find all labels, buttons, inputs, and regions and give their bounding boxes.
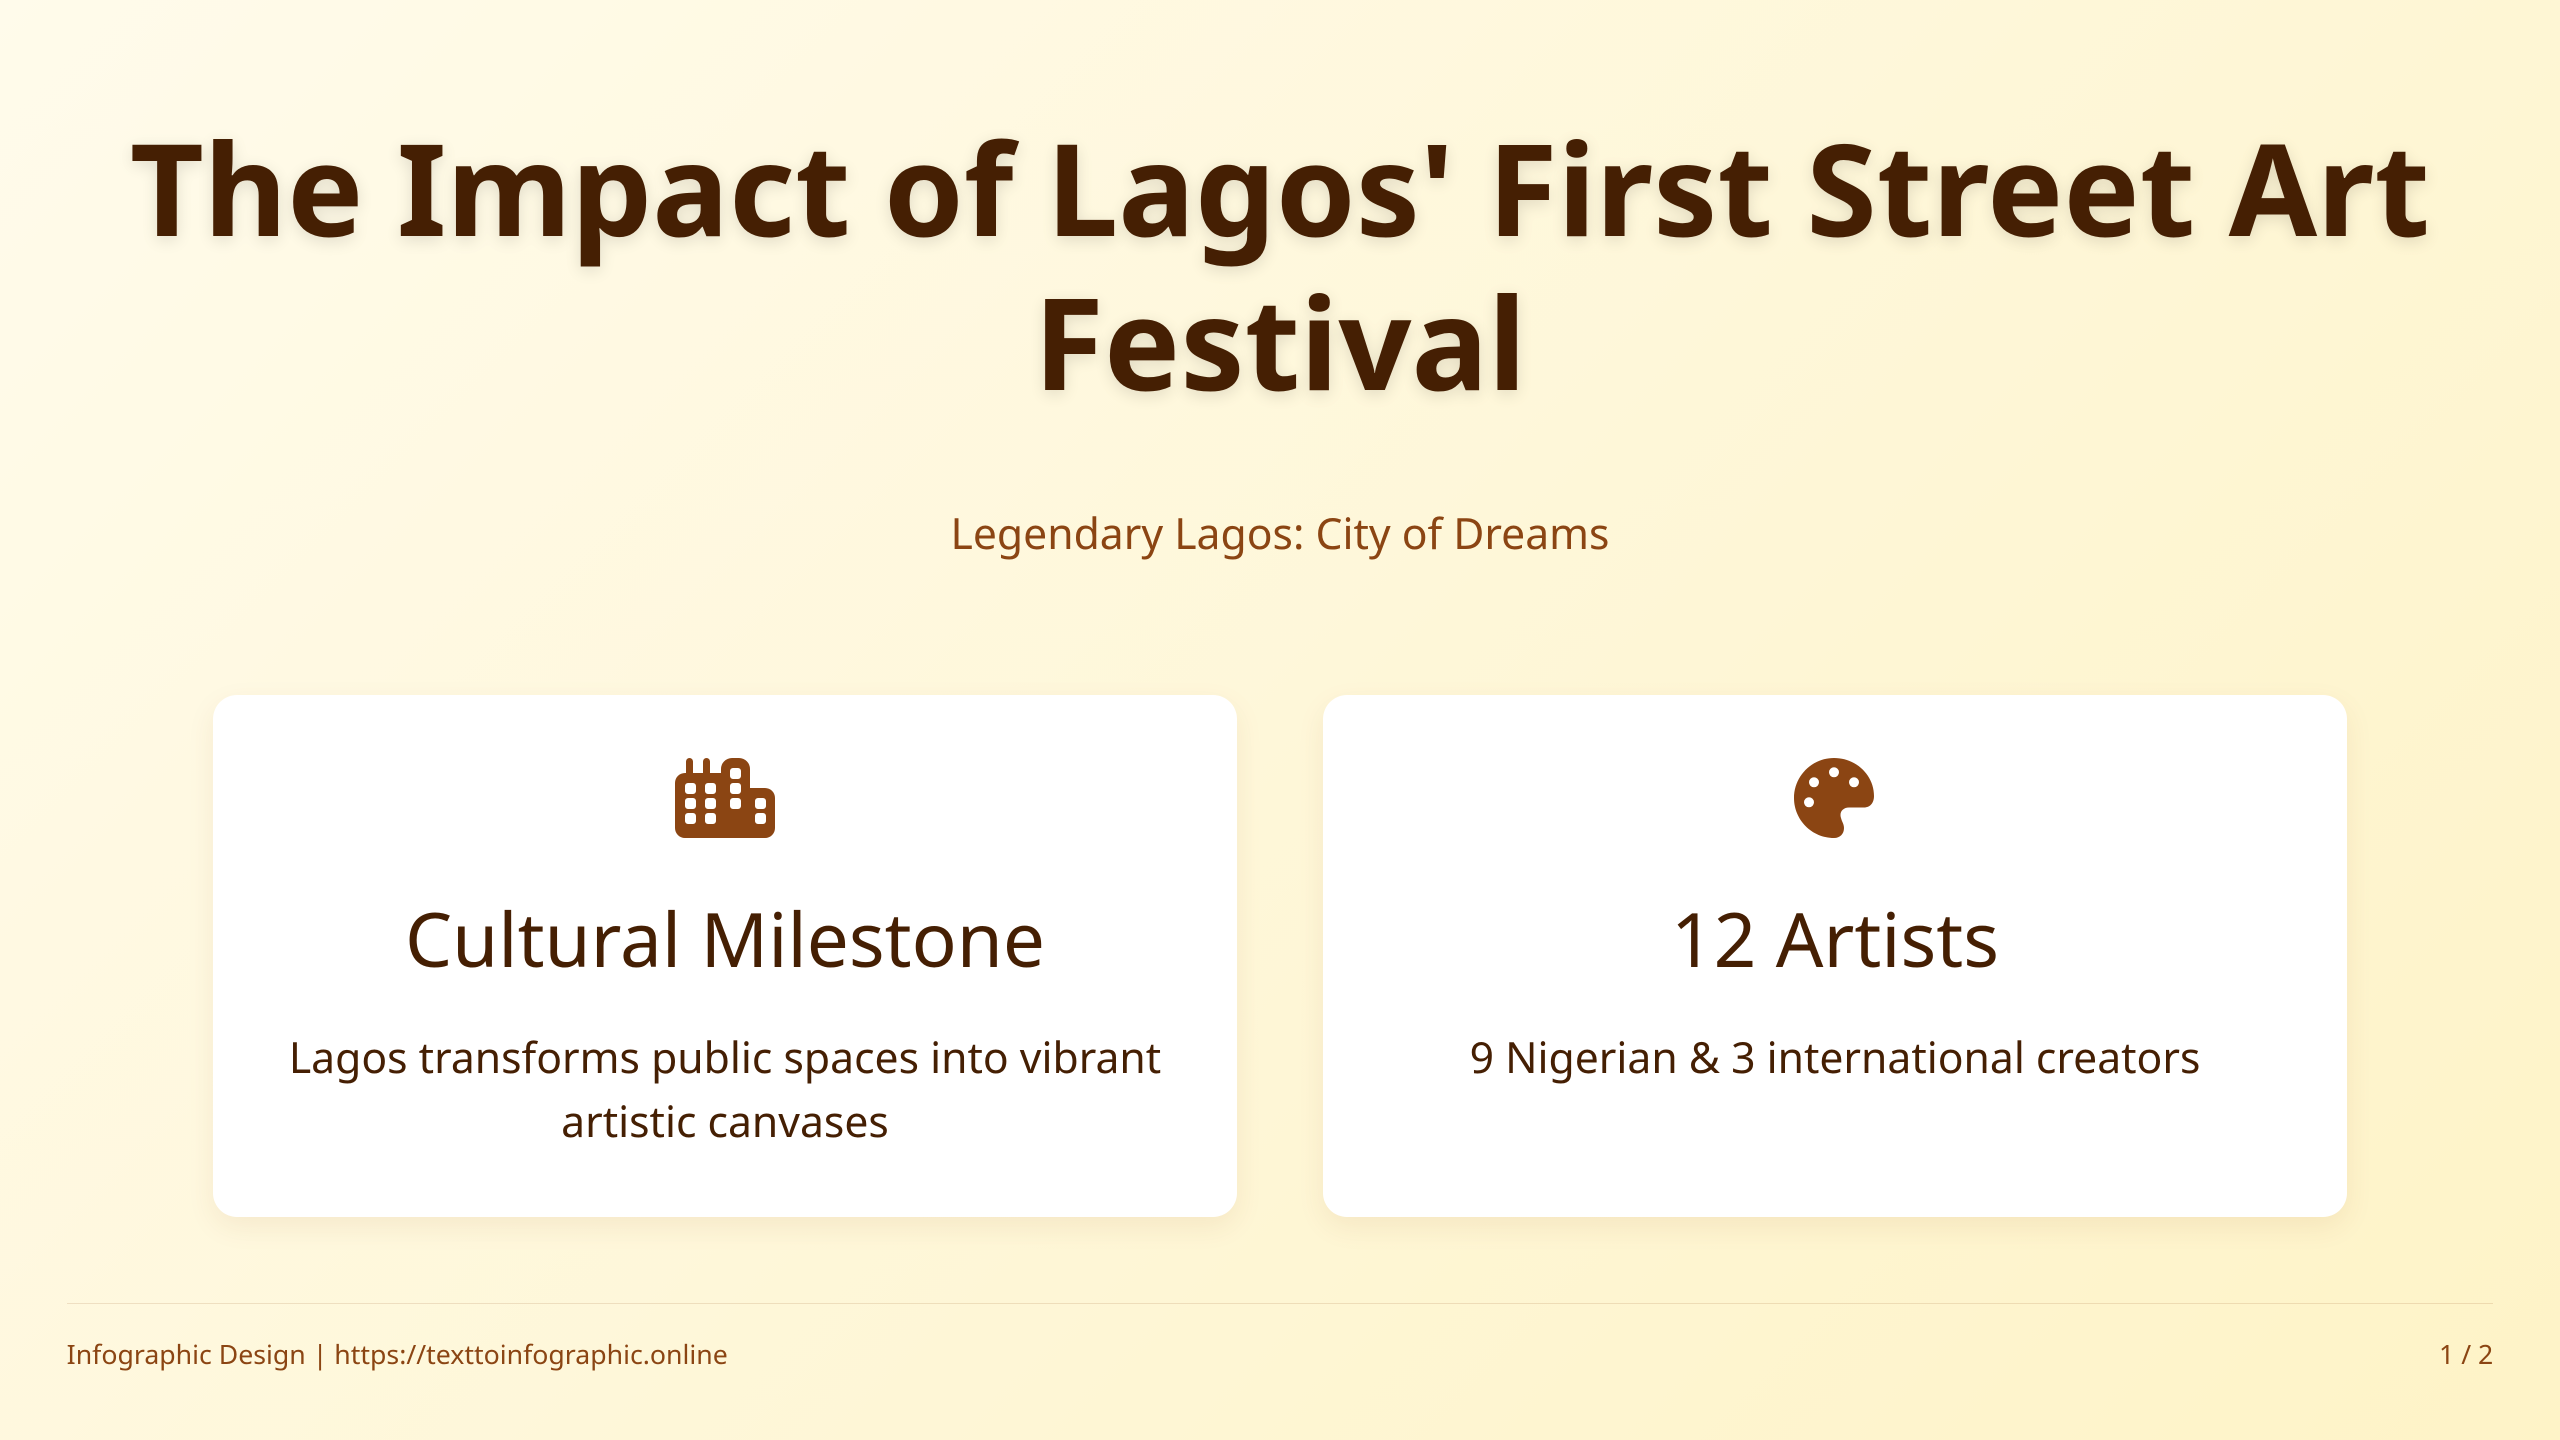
icon: artist palette [1794, 758, 1874, 838]
title: Festival [1034, 253, 1526, 428]
title [130, 99, 2430, 428]
text: cultural milestone description [289, 1027, 1161, 1150]
footer [67, 1303, 2493, 1384]
title: The Impact of Lagos' First Street Art [130, 99, 2430, 274]
text: cultural milestone description: Lagos transforms public spaces into vibrant [289, 1027, 1161, 1086]
panel: 12 artists [1323, 695, 2347, 1217]
icon: city buildings [675, 758, 775, 838]
text: cultural milestone description: artistic canvases [561, 1091, 889, 1150]
heading: 12 artists: 12 Artists [1671, 887, 1999, 989]
heading: cultural milestone: Cultural Milestone [405, 887, 1045, 989]
text: 12 artists description: 9 Nigerian & 3 international creators [1470, 1027, 2200, 1086]
panel: cultural milestone [213, 695, 1237, 1217]
footer credit: Infographic Design | https://texttoinfographic.online [67, 1335, 728, 1372]
subtitle: Legendary Lagos: City of Dreams [951, 503, 1609, 562]
page number: 1 / 2 [2439, 1335, 2493, 1372]
